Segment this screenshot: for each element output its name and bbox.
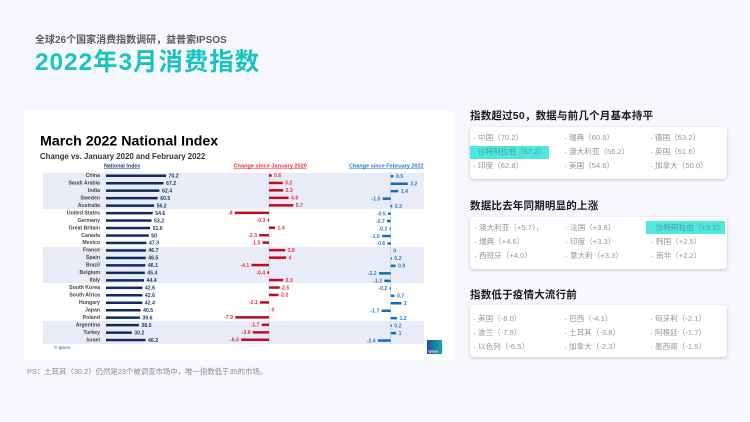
bar chart: change since February 2022: 3.2 xyxy=(410,182,418,188)
heading: index above 50: 指数超过50，数据与前几个月基本持平 xyxy=(470,110,653,122)
bar chart: change since February 2022: -1.7 xyxy=(370,308,380,314)
bar chart: national index: Japan xyxy=(85,308,100,314)
bar chart: national index: Australia xyxy=(78,203,100,209)
subtitle: 全球26个国家消费指数调研，益普索IPSOS xyxy=(35,34,227,46)
bar chart: change since January 2020: 0 xyxy=(272,308,274,314)
bar chart: national index: Italy xyxy=(90,278,100,284)
panel: countries above 50: 中国（70.2） xyxy=(478,133,523,142)
bar chart: national index: Saudi Arabia xyxy=(68,180,100,186)
panel: countries rising year on year: 法国（+3.8） xyxy=(570,223,615,232)
bar chart: national index: Canada xyxy=(81,233,100,239)
panel: countries rising year on year xyxy=(470,217,727,269)
bar chart: change since February 2022: -0.7 xyxy=(376,219,385,225)
bar chart: national index: 70.2 xyxy=(168,174,179,180)
panel: countries below pre-pandemic level: 波兰（-7.9） xyxy=(478,328,521,337)
bar chart: change since January 2020: 3.8 xyxy=(288,248,295,254)
bar chart: change since January 2020: -1.7 xyxy=(251,323,260,329)
panel: countries above 50: 英国（51.6） xyxy=(655,147,700,156)
bar chart: change since February 2022: -1.2 xyxy=(373,279,382,285)
panel: countries below pre-pandemic level: 加拿大（-2.3） xyxy=(569,342,620,351)
heading: clear year-on-year rise: 数据比去年同期明显的上涨 xyxy=(470,200,598,212)
panel: countries below pre-pandemic level: 匈牙利（-2.1） xyxy=(655,314,706,323)
panel: national index chart xyxy=(24,111,454,360)
bar chart: change since January 2020: 1.4 xyxy=(278,226,285,232)
bar chart: change since January 2020: -2.3 xyxy=(248,233,257,239)
bar chart: change since January 2020: -4.1 xyxy=(240,263,249,269)
panel: countries rising year on year: 澳大利亚（+5.7）， xyxy=(479,223,543,232)
bar chart: change since February 2022: 2 xyxy=(404,301,407,307)
panel: countries rising year on year: 意大利（+3.3） xyxy=(570,251,623,260)
panel: countries above 50: 沙特阿拉伯（67.2） xyxy=(478,147,546,156)
bar chart: national index: 67.2 xyxy=(166,181,176,187)
bar chart: change since January 2020: -2.1 xyxy=(249,300,258,306)
bar chart: national index: 42.6 xyxy=(145,286,155,292)
bar chart: change since January 2020: 2.2 xyxy=(281,293,288,299)
bar chart: national index: 56.2 xyxy=(157,203,167,209)
bar chart: change since February 2022: -2.4 xyxy=(367,338,376,344)
highlight: Saudi Arabia xyxy=(470,146,549,158)
column header: change since February 2022: Change since February 2022 xyxy=(349,164,424,170)
bar chart: change since January 2020: 3.2 xyxy=(285,181,292,187)
bar chart: change since January 2020: -8 xyxy=(228,211,233,217)
heading: below pre-pandemic level: 指数低于疫情大流行前 xyxy=(470,289,577,301)
bar chart: change since February 2022: 0.2 xyxy=(394,256,402,262)
bar chart: national index: 38.5 xyxy=(141,323,152,329)
bar chart: national index: Sweden xyxy=(80,195,100,201)
bar chart: change since January 2020: -3.8 xyxy=(242,330,251,336)
panel: countries below pre-pandemic level: 巴西（-4.1） xyxy=(569,314,612,323)
chart subtitle: Change vs. January 2020 and February 2022 xyxy=(40,152,206,161)
bar chart: change since February 2022: -1.6 xyxy=(371,234,380,240)
bar chart: national index: Poland xyxy=(83,315,100,321)
bar chart: national index: Spain xyxy=(86,255,100,261)
bar chart: change since January 2020: 2.5 xyxy=(282,285,289,291)
bar chart: national index: 46.1 xyxy=(148,263,158,269)
bar chart: national index: 46.7 xyxy=(148,248,159,254)
bar chart: national index: Turkey xyxy=(83,330,100,336)
bar chart: national index: 30.2 xyxy=(134,330,145,336)
column header: change since January 2020: Change since January 2020 xyxy=(234,164,307,170)
bar chart: national index: Great Britain xyxy=(69,225,100,231)
panel: countries rising year on year: 印度（+3.3） xyxy=(570,237,615,246)
bar chart: national index: India xyxy=(88,188,100,194)
bar chart: national index: 62.4 xyxy=(162,188,172,194)
bar chart: national index: 40.5 xyxy=(143,308,153,314)
panel: countries rising year on year: 韩国（+2.5） xyxy=(656,237,701,246)
bar chart: national index: 44.4 xyxy=(146,278,157,284)
bar chart: change since February 2022: -0.2 xyxy=(378,286,388,292)
bar chart: national index: Hungary xyxy=(79,300,100,306)
bar chart: national index xyxy=(67,173,179,344)
bar chart: change since January 2020: 4 xyxy=(288,255,292,261)
bar chart: change since January 2020 xyxy=(224,173,303,344)
panel: countries rising year on year: 南非（+2.2） xyxy=(656,251,701,260)
bar chart: change since January 2020: -1.5 xyxy=(251,240,261,246)
bar chart: change since February 2022: 1 xyxy=(399,331,402,337)
bar chart: national index: 54.6 xyxy=(155,211,165,217)
bar chart: national index: Mexico xyxy=(82,240,100,246)
panel: countries above 50: 美国（54.6） xyxy=(569,161,614,170)
bar chart: change since February 2022: 0.2 xyxy=(394,323,402,329)
bar chart: change since January 2020: 5.7 xyxy=(296,203,303,209)
panel: countries below pre-pandemic level: 土耳其（-3.8） xyxy=(569,328,620,337)
bar chart: change since January 2020: 3.3 xyxy=(286,188,293,194)
bar chart: national index: 39.6 xyxy=(142,315,153,321)
bar chart: national index: 45.4 xyxy=(147,271,158,277)
bar chart: change since January 2020: -7.9 xyxy=(224,315,233,321)
bar chart: change since January 2020: 4.6 xyxy=(291,196,298,202)
panel: countries above 50: 瑞典（60.5） xyxy=(569,133,614,142)
bar chart: change since January 2020: -0.3 xyxy=(257,218,266,224)
copyright note: © Ipsos xyxy=(54,344,71,350)
chart title: March 2022 National Index xyxy=(40,134,218,150)
bar chart: national index: Germany xyxy=(78,218,100,224)
bar chart: national index: 60.5 xyxy=(160,196,170,202)
bar chart: change since January 2020: -6.5 xyxy=(230,338,239,344)
bar chart: national index: 46.5 xyxy=(148,256,159,262)
bar chart: national index: 42.4 xyxy=(145,300,155,306)
bar chart: national index: Israel xyxy=(86,337,101,343)
bar chart: change since January 2020: 3.3 xyxy=(286,278,293,284)
footnote: PS：土耳其（30.2）仍然是23个被调查市场中，唯一指数低于35的市场。 xyxy=(27,366,267,376)
bar chart: change since January 2020: 0.6 xyxy=(274,173,281,179)
column header: national index: National Index xyxy=(104,164,140,170)
panel: countries above 50: 印度（62.8） xyxy=(478,161,523,170)
bar chart: change since February 2022: 0.3 xyxy=(395,204,402,210)
bar chart: change since February 2022: 0 xyxy=(393,249,396,255)
bar chart: national index: 46.2 xyxy=(148,338,158,344)
panel: countries above 50: 德国（53.2） xyxy=(655,133,700,142)
icon: Ipsos logo: Ipsos xyxy=(428,349,438,353)
bar chart: national index: 50 xyxy=(151,233,157,239)
bar chart: change since February 2022: 0.7 xyxy=(397,294,404,300)
bar chart: change since February 2022: -0.2 xyxy=(378,226,388,232)
bar chart: change since January 2020: -0.4 xyxy=(256,270,265,276)
bar chart: change since February 2022: -0.6 xyxy=(376,241,385,247)
bar chart: national index: France xyxy=(83,248,100,254)
bar chart: change since February 2022: 1.4 xyxy=(401,189,408,195)
panel: countries above 50: 澳大利亚（56.2） xyxy=(569,147,629,156)
bar chart: change since February 2022: 0.5 xyxy=(396,174,403,180)
panel: countries below pre-pandemic level: 阿根廷（-1.7） xyxy=(655,328,706,337)
panel: countries below pre-pandemic level: 以色列（-6.5） xyxy=(478,342,529,351)
bar chart: national index: 53.2 xyxy=(154,218,164,224)
bar chart: national index: South Africa xyxy=(69,292,100,298)
title: 2022年3月消费指数 xyxy=(35,49,260,76)
highlight: Saudi Arabia xyxy=(646,221,725,234)
bar chart: national index: Belgium xyxy=(80,270,100,276)
panel: countries rising year on year: 瑞典（+4.6） xyxy=(479,237,524,246)
icon: Ipsos logo xyxy=(427,340,442,354)
bar chart: national index: 51.6 xyxy=(153,226,163,232)
panel: countries below pre-pandemic level: 美国（-8.0） xyxy=(478,314,521,323)
bar chart: change since February 2022: 1.2 xyxy=(400,316,407,322)
panel: countries above 50: 加拿大（50.0） xyxy=(655,161,708,170)
bar chart: national index: United States xyxy=(67,210,100,216)
bar chart: change since February 2022: 0.9 xyxy=(398,264,405,270)
panel: countries below pre-pandemic level xyxy=(470,305,727,357)
panel: countries below pre-pandemic level: 墨西哥（-1.5） xyxy=(655,342,706,351)
bar chart: change since February 2022: -0.5 xyxy=(377,211,386,217)
bar chart: national index: South Korea xyxy=(69,285,100,291)
bar chart: national index: 42.6 xyxy=(145,293,155,299)
bar chart: change since February 2022: -1.5 xyxy=(372,196,381,202)
bar chart: change since February 2022: -2.2 xyxy=(368,271,377,277)
bar chart: national index: Brazil xyxy=(86,263,101,269)
bar chart: national index: China xyxy=(86,173,100,179)
bar chart: change since February 2022 xyxy=(367,174,418,344)
bar chart: national index: 47.3 xyxy=(149,241,159,247)
panel: countries rising year on year: 西班牙（+4.0） xyxy=(479,251,532,260)
panel: countries rising year on year: 沙特阿拉伯（+3.2） xyxy=(656,223,724,232)
bar chart: national index: Argentina xyxy=(76,322,100,328)
panel: countries above 50 xyxy=(470,127,727,179)
